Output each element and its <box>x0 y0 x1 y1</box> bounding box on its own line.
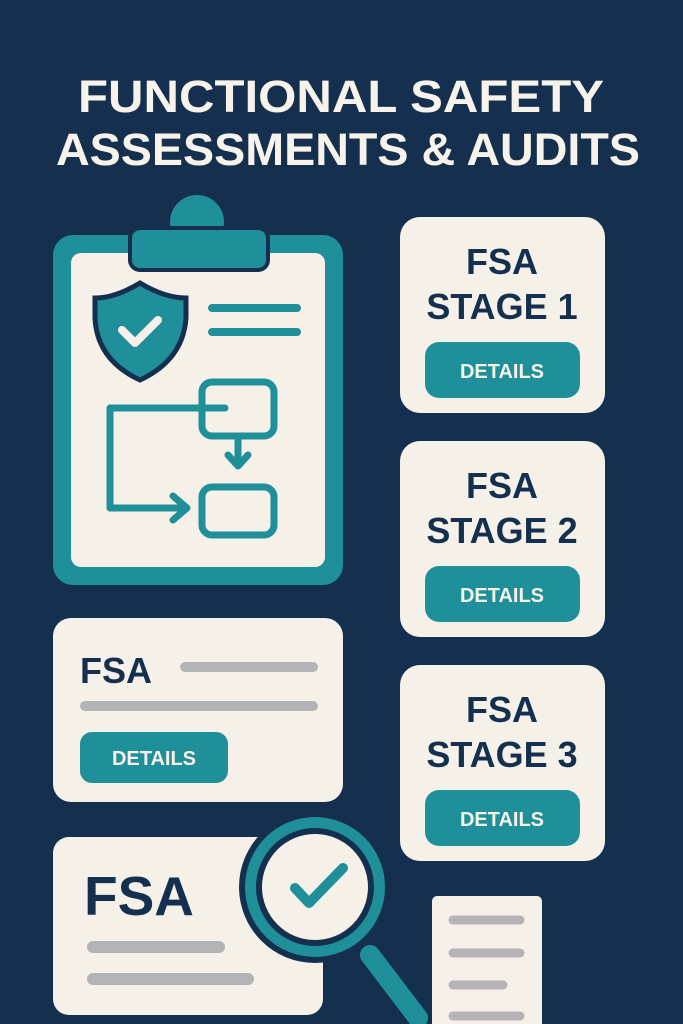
card: FSA stage 3 <box>400 665 605 861</box>
icon: clipboard <box>53 195 343 585</box>
card: FSA stage 2 <box>400 441 605 637</box>
title: ASSESSMENTS & AUDITS <box>56 124 640 175</box>
card: FSA stage 2: DETAILS <box>460 585 544 607</box>
card: FSA stage 2: STAGE 2 <box>426 510 578 551</box>
card: FSA stage 1 <box>400 217 605 413</box>
card: FSA summary: FSA <box>80 650 152 691</box>
title <box>56 71 640 175</box>
card: FSA report <box>53 837 323 1015</box>
card: FSA stage 3: STAGE 3 <box>426 734 578 775</box>
title: FUNCTIONAL SAFETY <box>78 71 604 122</box>
card: FSA stage 1: DETAILS <box>460 361 544 383</box>
icon: shield check <box>95 283 186 380</box>
document <box>432 896 542 1024</box>
flowchart <box>110 382 274 535</box>
card: FSA stage 1: STAGE 1 <box>426 286 578 327</box>
icon: magnifier <box>239 811 418 1018</box>
card: FSA report: FSA <box>84 865 194 927</box>
card: FSA summary <box>53 618 343 802</box>
card: FSA stage 3: DETAILS <box>460 809 544 831</box>
card: FSA stage 3: FSA <box>466 689 538 730</box>
card: FSA stage 2: FSA <box>466 465 538 506</box>
card: FSA summary: DETAILS <box>112 748 196 770</box>
card: FSA stage 1: FSA <box>466 241 538 282</box>
